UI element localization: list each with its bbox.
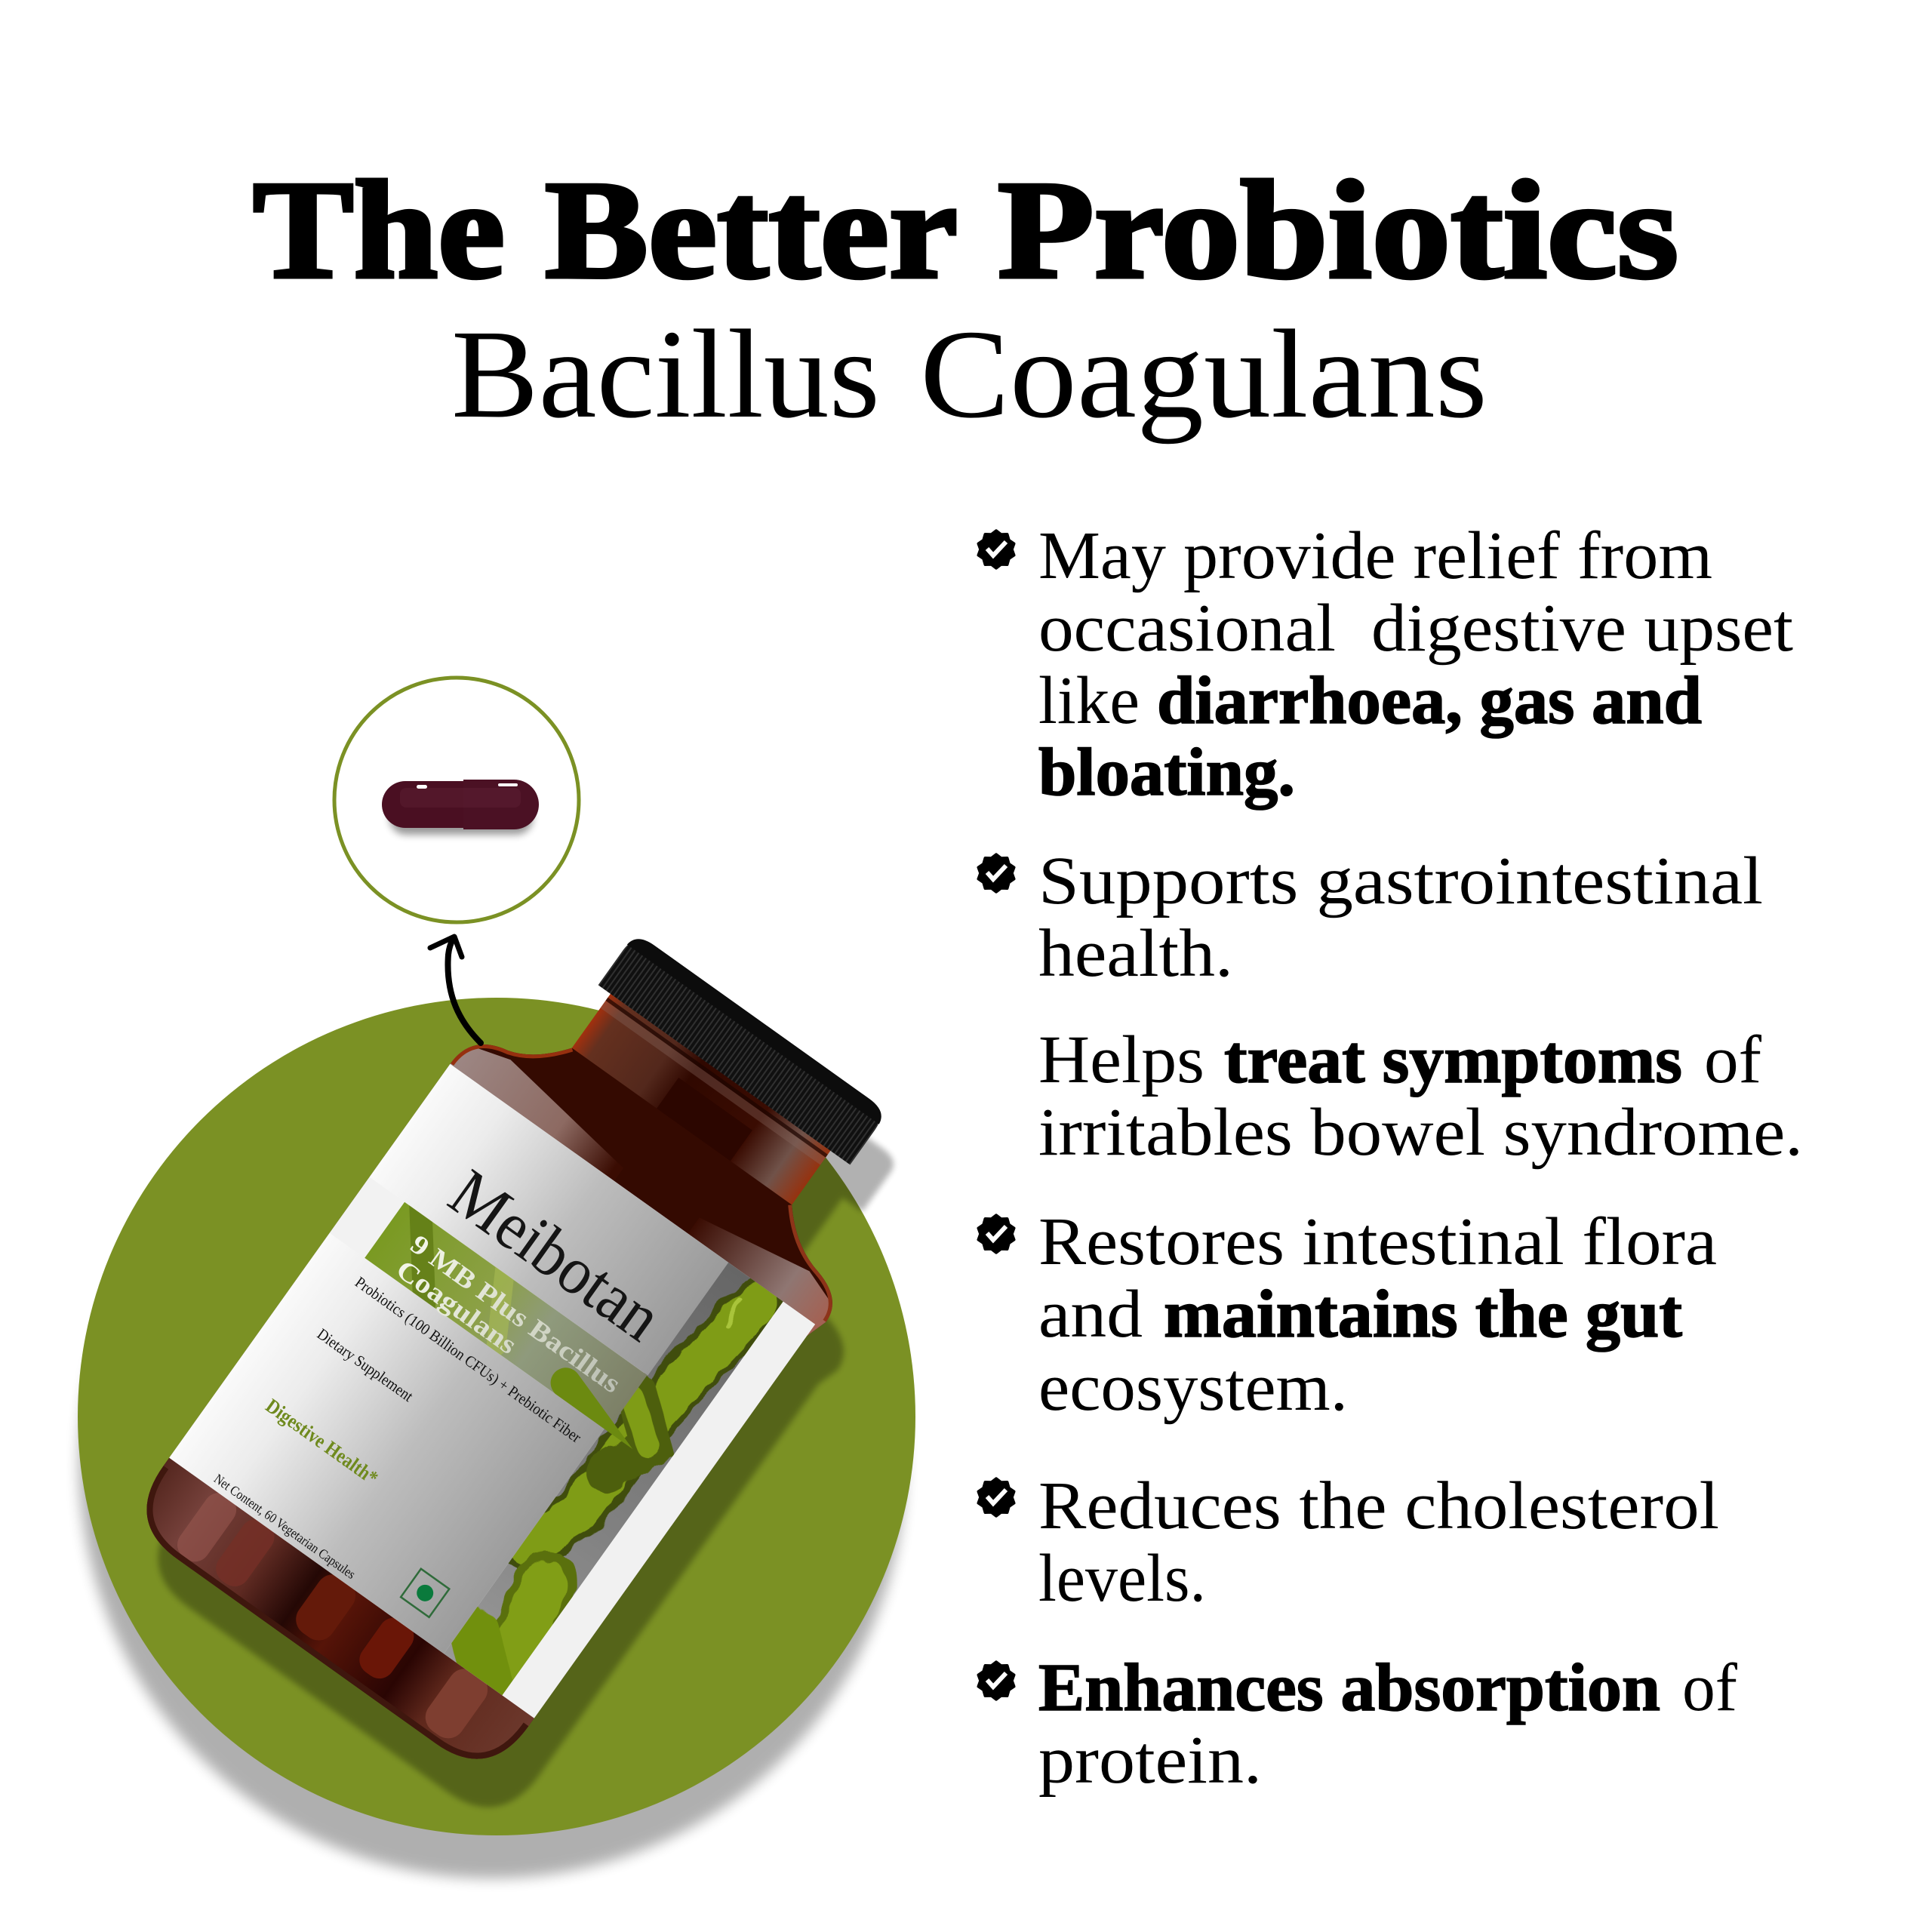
check badge (978, 1662, 1014, 1700)
upper front panel (370, 1064, 728, 1376)
label (166, 1064, 815, 1723)
benefit text: digestive upset (1371, 591, 1793, 666)
amber glass body (124, 995, 870, 1786)
bacteria image strip (440, 1260, 783, 1700)
capsule (382, 780, 539, 835)
benefit text: like (1038, 663, 1140, 738)
benefit 3 (978, 1204, 1717, 1425)
title: Better (545, 152, 958, 308)
benefit text: irritables bowel syndrome. (1038, 1095, 1803, 1170)
capsules visible through base (146, 1458, 534, 1759)
veg mark (401, 1569, 449, 1617)
benefit text (1038, 518, 1793, 810)
supplement bottle (146, 939, 881, 1759)
benefit text: levels. (1038, 1541, 1206, 1616)
title (253, 152, 1678, 308)
benefit 2 (978, 844, 1803, 1170)
benefit text: treat symptoms (1224, 1023, 1682, 1097)
subtitle: Coagulans (920, 304, 1487, 445)
check badge (978, 1215, 1014, 1253)
benefit text (1038, 1204, 1717, 1425)
title: Probiotics (998, 152, 1678, 308)
neck (568, 986, 835, 1211)
green product band (329, 1177, 648, 1449)
benefit text: Reduces the cholesterol (1038, 1469, 1719, 1543)
benefit text (1038, 1651, 1737, 1798)
white stripe (502, 1302, 815, 1718)
label small text: Dietary Supplement (314, 1324, 417, 1405)
benefit text: protein. (1038, 1723, 1262, 1798)
benefit text: Restores intestinal flora (1038, 1204, 1717, 1279)
benefit text: May provide relief from (1038, 518, 1712, 593)
top reflections (450, 1044, 832, 1336)
benefit text: health. (1038, 916, 1233, 991)
bottle cap (598, 932, 888, 1164)
check badge (978, 531, 1014, 568)
green product band: Coagulans (391, 1254, 522, 1360)
benefit text (1038, 1469, 1719, 1616)
benefit 1 (978, 518, 1793, 810)
title: The (253, 152, 505, 308)
callout circle with capsule (334, 678, 579, 922)
arrow (430, 937, 481, 1043)
bottle cast shadow (135, 937, 958, 1834)
label small text: Net Content, 60 Vegetarian Capsules (211, 1471, 358, 1582)
benefit text: maintains the gut (1164, 1277, 1682, 1352)
subtitle: Bacillus (451, 304, 880, 445)
lower front panel (169, 1233, 605, 1654)
benefit text: and (1038, 1277, 1143, 1352)
check badge (978, 1478, 1014, 1516)
label small text (211, 1272, 585, 1642)
benefit text: diarrhoea, gas and (1157, 663, 1702, 738)
subtitle (451, 304, 1487, 445)
green circle with drop shadow (78, 998, 915, 1878)
check badge (978, 854, 1014, 892)
brand logo: Meibotan (436, 1155, 675, 1355)
benefit text: of (1682, 1651, 1737, 1725)
benefit text: bloating. (1038, 735, 1295, 810)
label small text: Probiotics (100 Billion CFUs) + Prebiotic Fiber (352, 1273, 585, 1446)
benefit text: occasional (1038, 591, 1336, 666)
benefit text: Helps (1038, 1023, 1204, 1097)
benefit 4 (978, 1469, 1719, 1616)
benefit text: Supports gastrointestinal (1038, 844, 1763, 918)
benefit text: Enhances absorption (1038, 1651, 1660, 1725)
label small text: Digestive Health* (262, 1394, 383, 1489)
benefit text (1038, 844, 1803, 1170)
benefit 5 (978, 1651, 1737, 1798)
benefit text: ecosystem. (1038, 1350, 1348, 1425)
green product band: 9 MB Plus Bacillus (405, 1229, 626, 1399)
benefit text: of (1704, 1023, 1761, 1097)
